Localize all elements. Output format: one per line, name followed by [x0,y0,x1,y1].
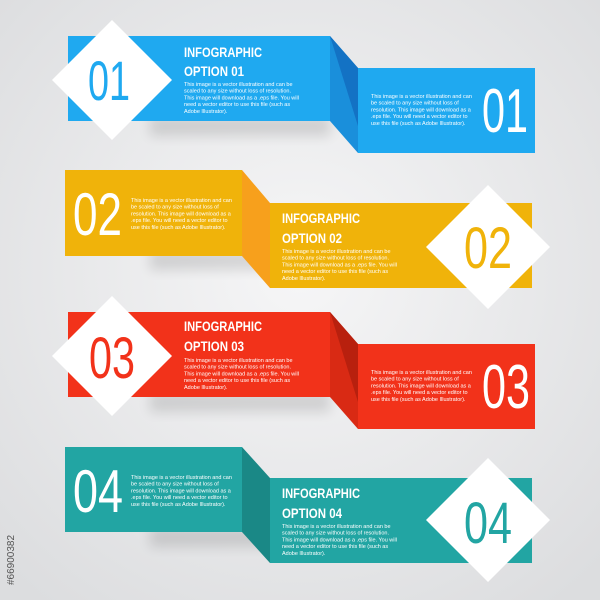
diamond with 04 [426,458,550,582]
row 4: option 04 [65,447,550,582]
right body text: use this file (such as Adobe Illustrator). [371,121,466,127]
body text: This image will download as a .eps file. You will [282,262,397,268]
body text: need a vector editor to use this file (such as [184,378,290,384]
diamond with 04: 04 [464,491,512,556]
row 1: option 01 [52,20,535,153]
big number 03: 03 [482,353,530,422]
left teal band [65,447,242,532]
body text: scaled to any size without loss of resolution. [184,89,291,95]
body text: This image will download as a .eps file. You will [184,371,299,377]
diamond with 01: 01 [88,49,130,112]
title [184,44,262,79]
right body text: be scaled to any size without loss of [371,101,459,107]
left body text [131,198,232,231]
left body text: .eps file. You will need a vector editor to [131,218,228,224]
left body text: This image is a vector illustration and can [131,475,232,481]
title: INFOGRAPHIC [282,210,360,226]
left body text: resolution. This image will download as a [131,488,232,494]
body text: Adobe Illustrator). [282,276,326,282]
right body text [371,94,472,127]
body text: This image is a vector illustration and can be [184,82,293,88]
left body text: be scaled to any size without loss of [131,482,219,488]
left body text: use this file (such as Adobe Illustrator). [131,225,226,231]
body text: need a vector editor to use this file (such as [282,544,388,550]
right body text: This image is a vector illustration and can [371,94,472,100]
big number 02: 02 [73,181,122,248]
body text [282,249,397,282]
title: INFOGRAPHIC [282,485,360,501]
row 2: option 02 [65,170,550,309]
right body text: resolution. This image will download as a [371,107,472,113]
body text: This image is a vector illustration and can be [184,358,293,364]
right red band [358,344,535,429]
diamond with 02: 02 [464,216,512,281]
side watermark id: #66900382 [6,535,17,585]
fold [330,36,358,153]
body text [184,358,299,391]
left body text: resolution. This image will download as a [131,211,232,217]
body text: Adobe Illustrator). [184,109,228,115]
title: OPTION 03 [184,338,244,354]
body text: scaled to any size without loss of resolution. [282,256,389,262]
title [282,485,360,521]
title: OPTION 02 [282,230,342,246]
body text: scaled to any size without loss of resolution. [184,365,291,371]
fold [242,170,270,288]
body text [282,524,397,557]
right body text: resolution. This image will download as a [371,383,472,389]
title: OPTION 04 [282,505,342,521]
body text [184,82,299,115]
diamond with 01 [52,20,172,140]
right body text: .eps file. You will need a vector editor to [371,390,468,396]
body text: Adobe Illustrator). [184,385,228,391]
right body text [371,370,472,403]
left body text: use this file (such as Adobe Illustrator). [131,502,226,508]
title: INFOGRAPHIC [184,44,262,60]
fold [242,447,270,563]
title: OPTION 01 [184,63,244,79]
right body text: be scaled to any size without loss of [371,377,459,383]
left body text: This image is a vector illustration and can [131,198,232,204]
right body text: .eps file. You will need a vector editor to [371,114,468,120]
fold [330,312,358,429]
title [184,318,262,354]
title: INFOGRAPHIC [184,318,262,334]
title [282,210,360,246]
body text: This image is a vector illustration and can be [282,524,391,530]
left yellow band [65,170,242,256]
body text: need a vector editor to use this file (such as [282,269,388,275]
left blue band [68,36,330,121]
left body text: be scaled to any size without loss of [131,205,219,211]
big number 01: 01 [482,77,528,146]
body text: scaled to any size without loss of resolution. [282,531,389,537]
body text: need a vector editor to use this file (such as [184,102,290,108]
diamond with 02 [426,185,550,309]
big number 04: 04 [73,458,123,525]
body text: Adobe Illustrator). [282,551,326,557]
row 3: option 03 [52,296,535,429]
right body text: This image is a vector illustration and can [371,370,472,376]
left body text [131,475,232,508]
right yellow band [270,203,532,288]
diamond with 03: 03 [89,326,135,391]
body text: This image is a vector illustration and can be [282,249,391,255]
body text: This image will download as a .eps file. You will [184,95,299,101]
right blue band [358,68,535,153]
diamond with 03 [52,296,172,416]
body text: This image will download as a .eps file. You will [282,537,397,543]
left red band [68,312,330,397]
right teal band [270,478,532,563]
right body text: use this file (such as Adobe Illustrator). [371,397,466,403]
left body text: .eps file. You will need a vector editor to [131,495,228,501]
